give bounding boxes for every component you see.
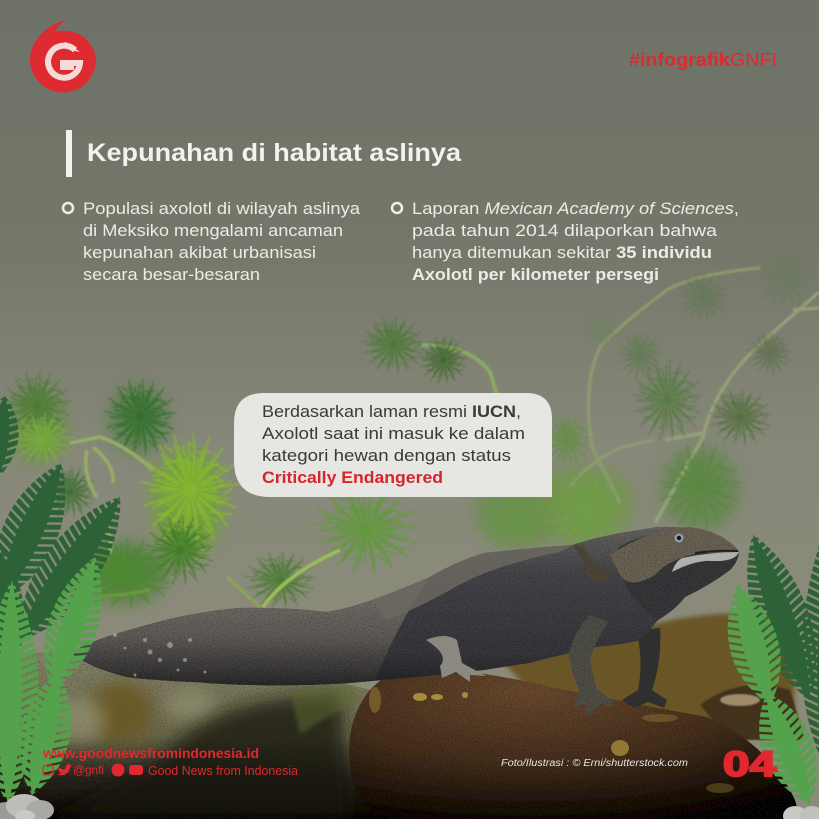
front leg (569, 615, 613, 716)
bullet right (392, 199, 739, 284)
ground right (500, 614, 805, 740)
callout: Critically Endangered (262, 468, 443, 487)
text left: kepunahan akibat urbanisasi (83, 243, 316, 262)
hind leg (426, 636, 486, 682)
text left: Populasi axolotl di wilayah aslinya (83, 199, 361, 218)
icon: instagram (43, 765, 53, 775)
text right: pada tahun 2014 dilaporkan bahwa (412, 221, 718, 240)
heading: Kepunahan di habitat aslinya (87, 139, 462, 167)
callout (234, 393, 552, 497)
fern light (0, 549, 819, 814)
background plants right (467, 245, 819, 557)
social row (43, 763, 298, 778)
credit: Foto/Ilustrasi : © Erni/shutterstock.com (501, 758, 688, 769)
bullet left (63, 199, 361, 284)
text right: Laporan Mexican Academy of Sciences , (412, 199, 739, 218)
far front leg (622, 628, 667, 708)
plant centre (227, 315, 497, 610)
text right: Axolotl per kilometer persegi (412, 265, 659, 284)
text left (83, 199, 361, 284)
eye (674, 534, 684, 542)
stones right (783, 806, 819, 819)
tail fin lighter (71, 577, 430, 685)
logo (30, 20, 96, 93)
rock (349, 668, 800, 819)
callout: Berdasarkan laman resmi IUCN, (262, 402, 521, 421)
body and tail (71, 527, 739, 685)
fern dark (0, 394, 819, 771)
page name: Good News from Indonesia (148, 764, 298, 778)
text left: di Meksiko mengalami ancaman (83, 221, 343, 240)
plant left (1, 369, 241, 610)
head (618, 530, 739, 620)
icon: youtube (129, 765, 143, 775)
dorsal fin (372, 545, 573, 620)
icon: facebook (112, 764, 124, 776)
mouth (672, 552, 739, 572)
callout: kategori hewan dengan status (262, 446, 511, 465)
axolotl (71, 527, 739, 716)
heading bar (66, 130, 72, 177)
icon: twitter (57, 764, 71, 775)
text left: secara besar-besaran (83, 265, 260, 284)
handle: @gnfi (73, 763, 104, 777)
website: www.goodnewsfromindonesia.id (42, 745, 259, 761)
gills (573, 544, 612, 583)
text right (412, 199, 739, 284)
callout: Axolotl saat ini masuk ke dalam (262, 424, 525, 443)
text right: hanya ditemukan sekitar 35 individu (412, 243, 712, 262)
page number: 04 (723, 745, 777, 784)
hashtag: #infografik GNFI (629, 50, 777, 70)
stones left (0, 794, 54, 819)
tail speckles (113, 633, 206, 676)
ground left (0, 652, 420, 819)
